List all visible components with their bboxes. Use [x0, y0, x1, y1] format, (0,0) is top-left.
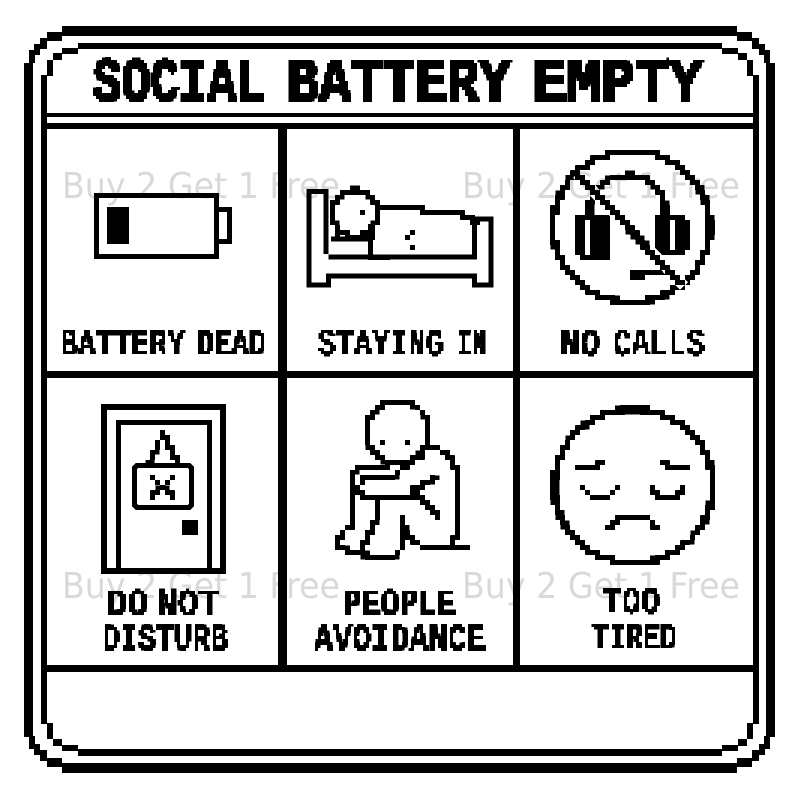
icon: crossed-out headset [553, 151, 710, 302]
label: people: PEOPLE [343, 584, 456, 627]
panel: no calls [553, 151, 710, 367]
label: battery dead: DEAD [197, 324, 266, 367]
panel: people avoidance [314, 401, 486, 662]
title: BATTERY [287, 49, 512, 120]
panel: battery dead [60, 196, 266, 367]
label: disturb: DISTURB [102, 619, 228, 662]
icon: tired sad face [554, 409, 713, 563]
label: battery dead: BATTERY [60, 324, 185, 367]
watermark: bottom right: Buy 2 Get 1 Free [462, 566, 740, 607]
label: avoidance: AVOIDANCE [314, 619, 486, 662]
label: do not [107, 584, 219, 627]
icon: person hugging knees [338, 401, 470, 556]
label: no calls: CALLS [613, 324, 705, 367]
icon: empty battery [96, 196, 230, 256]
label: staying in: STAYING [318, 324, 444, 367]
title: SOCIAL [93, 49, 265, 120]
title [93, 49, 704, 120]
label: staying in: IN [457, 324, 486, 367]
watermark: top left: Buy 2 Get 1 Free [62, 166, 340, 207]
watermark: top right: Buy 2 Get 1 Free [462, 166, 740, 207]
icon: person sleeping in bed [309, 190, 491, 285]
panel: staying in [309, 190, 491, 367]
label: no calls: NO [560, 324, 600, 367]
label: do not: DO [107, 584, 148, 627]
label: do not: NOT [157, 584, 219, 627]
icon: door with hanging sign [104, 407, 223, 571]
watermark: bottom left: Buy 2 Get 1 Free [62, 566, 340, 607]
label: tired: TIRED [592, 618, 677, 661]
title: EMPTY [533, 49, 704, 120]
label: no calls [560, 324, 705, 367]
label: too: TOO [603, 582, 660, 625]
panel: do not disturb [102, 407, 228, 662]
panel: too tired [554, 409, 713, 661]
